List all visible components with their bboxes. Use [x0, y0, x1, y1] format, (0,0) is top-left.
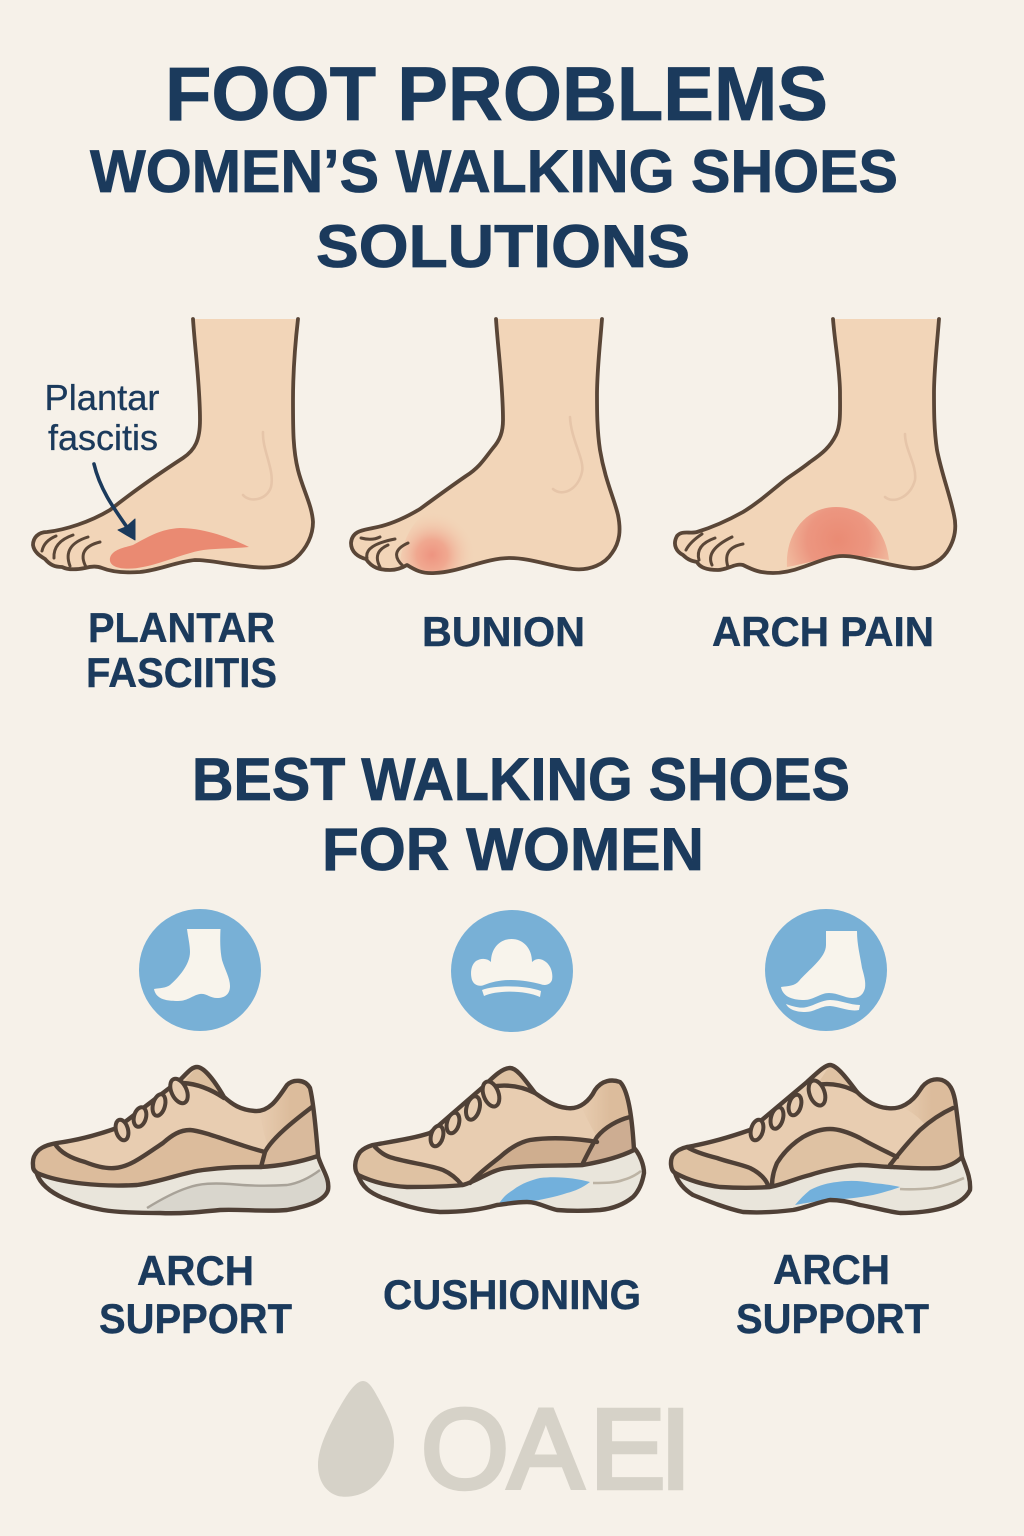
heading: best walking shoes: FOR WOMEN [322, 816, 704, 883]
foot skin [33, 319, 313, 572]
shoe: cushioning [355, 1068, 644, 1212]
label: arch support right: SUPPORT [736, 1295, 929, 1342]
shoe: arch support 2 [671, 1065, 970, 1213]
callout text: Plantar [44, 377, 160, 418]
problem labels [86, 604, 934, 696]
heading: best walking shoes [192, 746, 850, 883]
upper [33, 1067, 318, 1186]
foot skin [675, 319, 955, 573]
ankle crease [885, 434, 915, 500]
label: arch support left: ARCH [137, 1247, 254, 1294]
arch pain highlight [787, 507, 889, 567]
shoe outlines [355, 1068, 644, 1212]
label: arch pain: ARCH PAIN [712, 608, 934, 655]
sole [358, 1149, 644, 1212]
foot skin [351, 319, 620, 573]
panel: arch pain foot [675, 319, 955, 573]
laces [113, 1076, 191, 1142]
foot outline [351, 319, 620, 573]
label: cushioning: CUSHIONING [383, 1271, 641, 1318]
inflamed plantar fascia [110, 528, 249, 569]
panel: bunion foot [351, 319, 620, 573]
sole [37, 1156, 328, 1213]
label: arch support left: SUPPORT [99, 1295, 292, 1342]
blue arch insert [498, 1177, 590, 1205]
benefit labels [99, 1246, 929, 1342]
toes [361, 537, 408, 567]
foot outline [675, 319, 955, 573]
label: arch support right [736, 1246, 929, 1342]
blue arch insert [795, 1181, 900, 1205]
midsole line [900, 1178, 964, 1189]
ankle crease [243, 432, 272, 499]
watermark logo [318, 1381, 691, 1512]
label: bunion: BUNION [422, 608, 585, 655]
label: plantar fasciitis: PLANTAR [88, 604, 275, 651]
label: arch support left [99, 1247, 292, 1342]
subtitle: women's walking shoes: WOMEN’S WALKING SHOES [90, 138, 898, 205]
icon: foot arch support [139, 909, 261, 1031]
panel: plantar fasciitis foot [33, 319, 313, 572]
icon: cushioning [451, 910, 573, 1032]
arrow [94, 464, 135, 540]
bunion inflammation [400, 511, 476, 573]
title: foot problems: FOOT PROBLEMS [165, 52, 828, 137]
subtitle: solutions: SOLUTIONS [316, 213, 690, 280]
upper [355, 1068, 634, 1187]
foot outline [33, 319, 313, 572]
upper [671, 1065, 962, 1188]
sole [675, 1157, 970, 1213]
callout text [44, 377, 160, 458]
shoe outlines [33, 1067, 328, 1213]
toes [686, 534, 743, 567]
logo drop [318, 1381, 394, 1497]
toes [42, 535, 100, 567]
label: arch support right: ARCH [773, 1246, 890, 1293]
icon: foot on arch insole [765, 909, 887, 1031]
laces [748, 1078, 828, 1142]
heading: best walking shoes: BEST WALKING SHOES [192, 746, 850, 813]
laces [428, 1079, 502, 1148]
midsole line [593, 1171, 641, 1183]
logo text: OAEI [421, 1386, 691, 1512]
callout text: fascitis [48, 417, 158, 458]
ankle crease [553, 417, 582, 492]
shoe outlines [671, 1065, 970, 1213]
label: plantar fasciitis [86, 604, 277, 696]
title block [90, 52, 898, 280]
label: plantar fasciitis: FASCIITIS [86, 649, 277, 696]
shoe: arch support 1 [33, 1067, 328, 1213]
